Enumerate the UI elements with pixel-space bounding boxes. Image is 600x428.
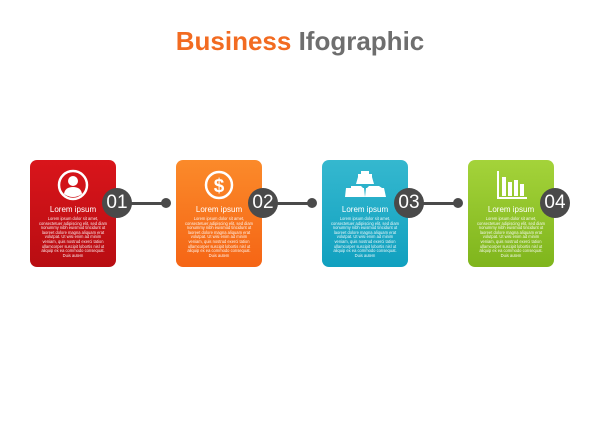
card 3: Lorem ipsum dolor sit amet, consectetuer adipiscing elit, sed diam nonummy nibh euismod tincidunt ut laoreet dolore magna aliquam erat volutpat. Ut wisi enim ad minim veniam, quis nostrud exerci tation ullamcorper suscipit lobortis nisl ut aliquip ex ea commodo consequat. Duis autem <box>331 216 399 258</box>
card 2: Lorem ipsum <box>196 205 242 214</box>
icon: bar chart <box>497 171 527 199</box>
card 1 <box>30 160 116 267</box>
card 4: Lorem ipsum <box>488 205 534 214</box>
number 03 <box>394 188 424 218</box>
connector 1 <box>130 202 165 205</box>
card 2 <box>176 160 262 267</box>
number 02 <box>248 188 278 218</box>
card 3 <box>322 160 408 267</box>
number 02: 02 <box>252 192 274 213</box>
number 04 <box>540 188 570 218</box>
dot 2 <box>307 198 317 208</box>
title: Business Ifographic <box>176 26 424 56</box>
icon: person <box>58 170 88 200</box>
card 3: Lorem ipsum <box>342 205 388 214</box>
number 01 <box>102 188 132 218</box>
number 03: 03 <box>398 192 420 213</box>
connector 3 <box>422 202 457 205</box>
connector 2 <box>276 202 311 205</box>
number 01: 01 <box>106 192 128 213</box>
icon: dollar <box>204 170 234 200</box>
card 4 <box>468 160 554 267</box>
card 4: Lorem ipsum dolor sit amet, consectetuer adipiscing elit, sed diam nonummy nibh euismod tincidunt ut laoreet dolore magna aliquam erat volutpat. Ut wisi enim ad minim veniam, quis nostrud exerci tation ullamcorper suscipit lobortis nisl ut aliquip ex ea commodo consequat. Duis autem <box>477 216 545 258</box>
dot 1 <box>161 198 171 208</box>
dot 3 <box>453 198 463 208</box>
card 2: Lorem ipsum dolor sit amet, consectetuer adipiscing elit, sed diam nonummy nibh euismod tincidunt ut laoreet dolore magna aliquam erat volutpat. Ut wisi enim ad minim veniam, quis nostrud exerci tation ullamcorper suscipit lobortis nisl ut aliquip ex ea commodo consequat. Duis autem <box>185 216 253 258</box>
icon: dollar: $ <box>214 176 225 197</box>
card 1: Lorem ipsum dolor sit amet, consectetuer adipiscing elit, sed diam nonummy nibh euismod tincidunt ut laoreet dolore magna aliquam erat volutpat. Ut wisi enim ad minim veniam, quis nostrud exerci tation ullamcorper suscipit lobortis nisl ut aliquip ex ea commodo consequat. Duis autem <box>39 216 107 258</box>
card 1: Lorem ipsum <box>50 205 96 214</box>
number 04: 04 <box>544 192 566 213</box>
icon: gold bars <box>345 171 386 197</box>
